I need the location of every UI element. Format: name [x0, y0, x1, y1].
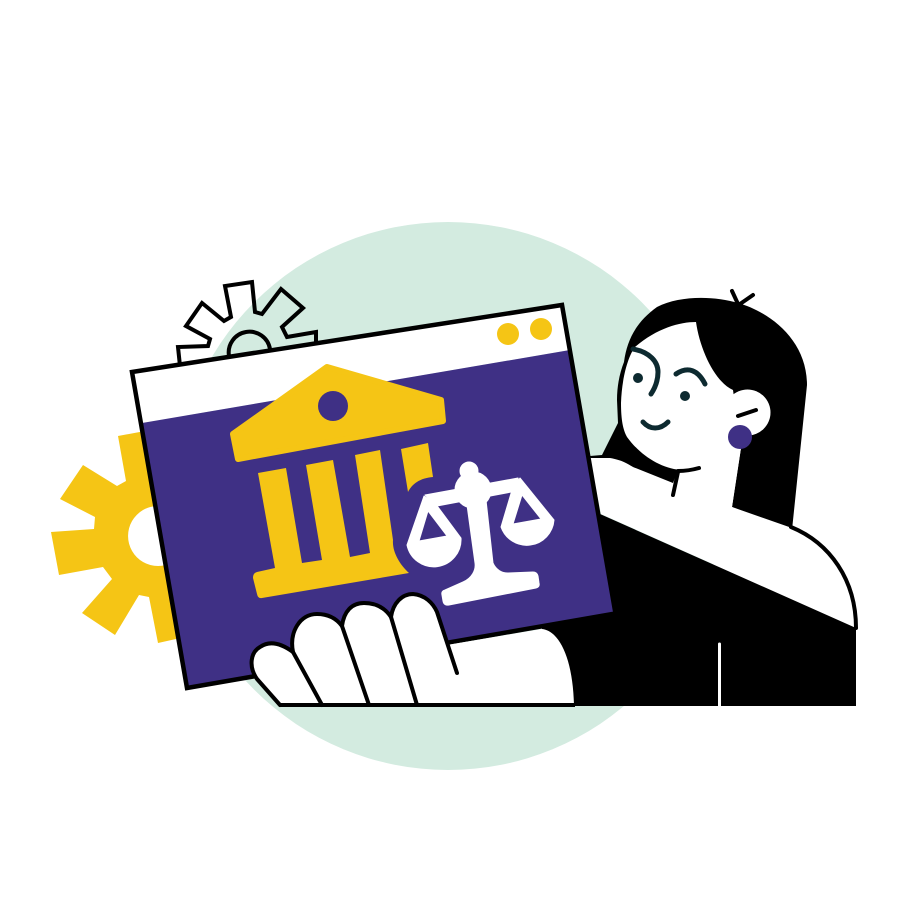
finger outlines	[252, 594, 575, 705]
icon: government building	[233, 367, 443, 598]
right column	[401, 443, 433, 492]
shirt seam	[718, 644, 721, 706]
icon: scales of justice	[407, 462, 554, 605]
shoulder and chest	[590, 448, 856, 628]
browser window	[132, 305, 616, 688]
roof medallion	[318, 391, 348, 421]
shoulder outline	[791, 527, 856, 628]
scale beam	[425, 478, 522, 506]
icon: outlined gear	[178, 282, 316, 366]
window buttons	[497, 318, 552, 345]
columns and base	[253, 450, 409, 598]
window outline	[132, 305, 616, 688]
ear	[724, 390, 770, 436]
building roof	[233, 367, 443, 459]
earring	[728, 425, 752, 449]
scale knob	[460, 462, 478, 480]
window content panel	[142, 350, 616, 688]
black top	[540, 514, 856, 706]
palm and fingers fill	[252, 593, 574, 705]
hair	[590, 298, 807, 530]
right pan	[501, 478, 554, 545]
window title bar	[132, 305, 570, 423]
person	[540, 291, 856, 706]
icon: yellow gear	[51, 431, 200, 643]
face	[621, 322, 741, 470]
left pan	[407, 496, 461, 567]
facial features	[633, 349, 705, 428]
background: mint circle	[174, 222, 722, 770]
hand	[252, 593, 575, 705]
scale stem and foot	[442, 500, 539, 605]
scale hub	[455, 472, 491, 508]
jaw and neck lines	[673, 410, 756, 495]
hair tufts	[732, 291, 753, 304]
